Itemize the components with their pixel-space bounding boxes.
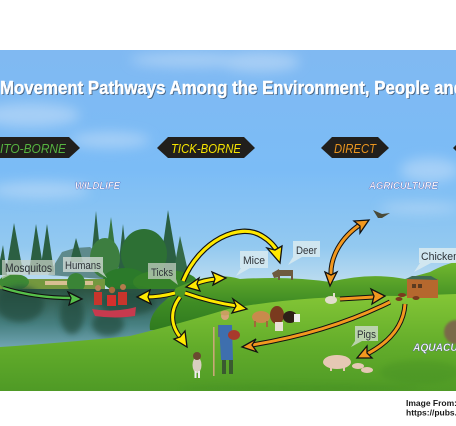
image credit: Image From: <box>406 398 456 408</box>
speech bubble: humans <box>63 257 107 278</box>
speech bubble: humans: Humans <box>65 260 101 272</box>
arrow: chickens to farmer (orange) <box>242 302 390 352</box>
chicken coop <box>406 276 438 298</box>
speech bubble: chicken <box>414 248 456 272</box>
speech bubble: pigs <box>351 326 378 347</box>
speech bubble: mice <box>236 251 268 276</box>
far shore <box>0 279 105 289</box>
dog <box>192 352 202 378</box>
left conifers <box>0 223 83 275</box>
arrow: ticks to dog (yellow) <box>173 297 187 347</box>
badge: mosquito-borne <box>0 137 80 158</box>
tree reflections <box>0 286 156 336</box>
cattle <box>252 306 300 331</box>
back hills <box>150 262 456 330</box>
arrow: chickens to pigs (orange) <box>357 304 405 358</box>
clouds <box>0 52 456 213</box>
speech bubble: mosquitos: Mosquitos <box>5 263 52 275</box>
arrow: ticks to and from mice (yellow) <box>186 272 226 291</box>
arrow: mosquitos to humans (green) <box>3 288 82 305</box>
speech bubble: mice: Mice <box>243 255 265 267</box>
sky <box>0 50 456 290</box>
right tree group <box>90 210 197 294</box>
badge: direct: DIRECT <box>334 141 377 156</box>
pigs <box>323 355 373 373</box>
chickens <box>396 293 420 301</box>
arrow: ticks to mice (yellow) <box>183 231 282 281</box>
arrow: goose to chickens (orange) <box>340 289 385 304</box>
label: wildlife: WILDLIFE <box>75 180 121 192</box>
badge: mosquito-borne: ITO-BORNE <box>0 141 66 156</box>
grass shading <box>406 364 435 366</box>
distant mountain <box>48 247 104 279</box>
farmer <box>213 310 240 376</box>
lake <box>0 289 176 347</box>
dirt bank <box>444 320 456 344</box>
speech bubble: mosquitos <box>2 260 55 279</box>
deer <box>272 269 293 280</box>
arrow: ticks to humans (yellow) <box>137 290 175 304</box>
speech bubble: ticks <box>148 263 178 285</box>
arrow: duck and goose (orange) <box>325 220 369 286</box>
arrow: ticks to cattle (yellow) <box>185 293 247 313</box>
speech bubble: deer: Deer <box>296 245 317 257</box>
badge: direct <box>321 137 389 158</box>
badge: clipped fourth <box>453 145 456 151</box>
canoe with people <box>92 284 136 318</box>
image credit <box>406 398 456 418</box>
speech bubble: deer <box>288 241 320 265</box>
speech bubble: ticks: Ticks <box>151 267 173 279</box>
goose <box>325 293 337 304</box>
foreground field <box>0 294 456 391</box>
badge: tick-borne: TICK-BORNE <box>171 141 241 156</box>
speech bubble: pigs: Pigs <box>357 329 376 341</box>
badge: tick-borne <box>157 137 255 158</box>
label: agriculture: AGRICULTURE <box>368 180 439 192</box>
top white band <box>0 0 456 50</box>
flying duck <box>373 210 390 218</box>
